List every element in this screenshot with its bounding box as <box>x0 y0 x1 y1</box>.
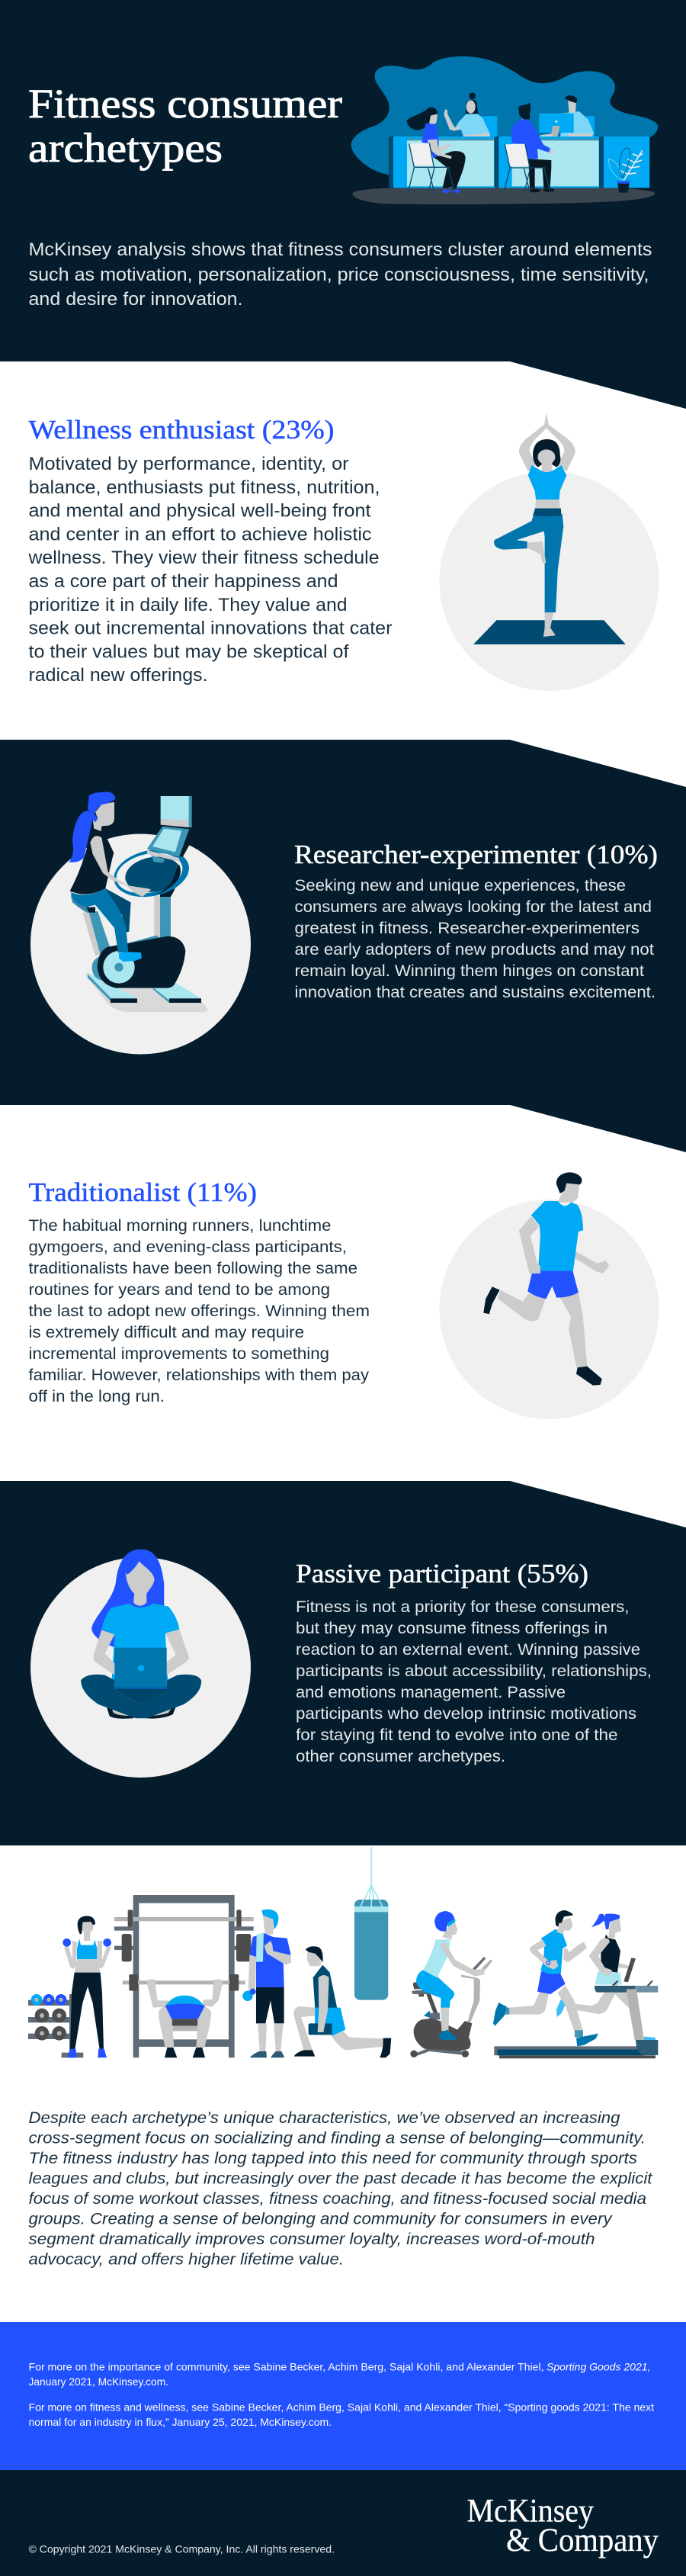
closing paragraph: advocacy, and offers higher lifetime value. <box>29 2251 344 2268</box>
icon: woman on exercise bike in circle <box>30 792 251 1054</box>
body text: passive participant: participants is about accessibility, relationships, <box>296 1662 652 1680</box>
heading: passive participant: Passive participant (55%) <box>296 1559 588 1588</box>
body text: wellness enthusiast: wellness. They view their fitness schedule <box>27 548 379 568</box>
reference notes: January 2021, McKinsey.com. <box>29 2375 168 2388</box>
body text: passive participant <box>296 1598 652 1765</box>
treadmill and two runners <box>493 1910 658 2058</box>
closing paragraph: The fitness industry has long tapped into this need for community through sports <box>29 2150 638 2167</box>
man seated on chair <box>504 102 556 194</box>
body text: passive participant: for staying fit tend to evolve into one of the <box>296 1726 617 1744</box>
closing paragraph <box>29 2109 653 2268</box>
logo: McKinsey & Company: & Company <box>506 2523 659 2558</box>
reference notes: For more on the importance of community, see Sabine Becker, Achim Berg, Sajal Kohli, and Alexander Thiel, <box>29 2361 544 2373</box>
reference notes: normal for an industry in flux,” January 25, 2021, McKinsey.com. <box>29 2416 332 2428</box>
woman with dumbbells <box>63 1916 111 2057</box>
reference notes <box>29 2361 654 2428</box>
body text: researcher-experimenter: consumers are always looking for the latest and <box>294 898 652 916</box>
panel: references <box>0 2322 686 2470</box>
panel: wellness enthusiast <box>27 413 659 691</box>
body text: researcher-experimenter: greatest in fitness. Researcher-experimenters <box>294 920 640 937</box>
intro text: such as motivation, personalization, price consciousness, time sensitivity, <box>29 265 649 285</box>
body text: researcher-experimenter: are early adopters of new products and may not <box>294 941 654 959</box>
man behind desk with monitor <box>539 95 594 138</box>
reference notes: For more on fitness and wellness, see Sabine Becker, Achim Berg, Sajal Kohli, and Alexander Thiel, “Sporting goods 2021: The next <box>29 2401 654 2413</box>
icon: yoga figure in circle <box>439 413 659 691</box>
trainer with towel <box>242 1910 291 2057</box>
body text: traditionalist: is extremely difficult and may require <box>29 1324 304 1341</box>
body text: wellness enthusiast: prioritize it in daily life. They value and <box>29 595 348 615</box>
body text: wellness enthusiast: Motivated by performance, identity, or <box>29 454 349 474</box>
body text: passive participant: and emotions management. Passive <box>296 1684 566 1701</box>
body text: wellness enthusiast: radical new offerings. <box>29 665 207 686</box>
intro text <box>29 239 652 310</box>
logo: McKinsey & Company <box>466 2494 659 2558</box>
closing paragraph: cross-segment focus on socializing and finding a sense of belonging—community. <box>29 2129 646 2147</box>
body text: wellness enthusiast: balance, enthusiasts put fitness, nutrition, <box>29 477 380 498</box>
panel: header <box>0 0 686 409</box>
body text: researcher-experimenter: innovation that creates and sustains excitement. <box>294 984 656 1001</box>
closing paragraph: groups. Creating a sense of belonging and community for consumers in every <box>29 2210 613 2228</box>
copyright: © Copyright 2021 McKinsey & Company, Inc. All rights reserved. <box>29 2542 335 2555</box>
desks <box>389 137 649 188</box>
heading: traditionalist: Traditionalist (11%) <box>29 1177 257 1207</box>
closing paragraph: segment dramatically improves consumer loyalty, increases word-of-mouth <box>29 2231 595 2248</box>
punching bag <box>354 1847 388 2000</box>
title: archetypes <box>28 125 223 171</box>
body text: traditionalist: routines for years and tend to be among <box>29 1281 330 1299</box>
body text: wellness enthusiast: as a core part of their happiness and <box>29 571 338 592</box>
illustration: people meeting at desks <box>351 56 658 204</box>
icon: runner in circle <box>439 1172 659 1419</box>
intro text: and desire for innovation. <box>29 289 242 310</box>
body text: traditionalist: familiar. However, relationships with them pay <box>29 1367 370 1384</box>
body text: wellness enthusiast: and mental and physical well-being front <box>29 500 371 522</box>
illustration: gym scene, right <box>410 1910 658 2058</box>
man on bench press <box>147 1979 223 2057</box>
body text: passive participant: other consumer archetypes. <box>296 1748 505 1765</box>
body text: wellness enthusiast: to their values but may be skeptical of <box>29 642 349 662</box>
man lunging with dumbbell <box>293 1946 391 2057</box>
panel: passive participant <box>0 1481 686 1845</box>
body text: researcher-experimenter: remain loyal. Winning them hinges on constant <box>294 962 644 980</box>
closing paragraph: focus of some workout classes, fitness coaching, and fitness-focused social media <box>29 2190 646 2208</box>
plant <box>608 148 643 193</box>
title <box>28 81 342 171</box>
body text: wellness enthusiast: and center in an effort to achieve holistic <box>29 525 371 544</box>
body text: passive participant: reaction to an external event. Winning passive <box>296 1641 640 1659</box>
body text: traditionalist: traditionalists have been following the same <box>29 1260 357 1277</box>
body text: traditionalist: the last to adopt new offerings. Winning them <box>29 1302 370 1320</box>
closing paragraph: Despite each archetype’s unique characteristics, we’ve observed an increasing <box>29 2109 620 2127</box>
heading: wellness enthusiast: Wellness enthusiast (23%) <box>29 415 334 445</box>
panel: traditionalist <box>29 1172 659 1419</box>
body text: researcher-experimenter: Seeking new and unique experiences, these <box>294 877 626 895</box>
body text: researcher-experimenter <box>294 877 656 1001</box>
squat rack with barbells <box>114 1895 254 2057</box>
panel: researcher-experimenter <box>0 740 686 1152</box>
icon: seated woman with laptop in circle <box>30 1550 251 1778</box>
woman on exercise bike <box>410 1911 492 2057</box>
body text: wellness enthusiast <box>27 454 392 686</box>
body text: passive participant: participants who develop intrinsic motivations <box>296 1705 636 1723</box>
body text: passive participant: but they may consume fitness offerings in <box>296 1620 607 1637</box>
intro text: McKinsey analysis shows that fitness consumers cluster around elements <box>29 239 652 260</box>
illustration: gym scene, left <box>28 1847 391 2057</box>
woman behind desk <box>444 92 490 138</box>
weight shelf <box>28 1994 83 2057</box>
closing paragraph: leagues and clubs, but increasingly over the past decade it has become the explicit <box>29 2170 653 2187</box>
logo: McKinsey & Company: McKinsey <box>466 2494 594 2529</box>
body text: traditionalist: off in the long run. <box>29 1388 165 1405</box>
woman seated on chair <box>406 108 466 193</box>
heading: researcher-experimenter: Researcher-experimenter (10%) <box>294 840 658 869</box>
body text: passive participant: Fitness is not a priority for these consumers, <box>296 1598 630 1616</box>
body text: traditionalist <box>29 1217 370 1405</box>
title: Fitness consumer <box>28 81 342 127</box>
panel: footer <box>0 2470 686 2576</box>
body text: traditionalist: The habitual morning runners, lunchtime <box>29 1217 331 1235</box>
body text: traditionalist: gymgoers, and evening-class participants, <box>29 1238 347 1256</box>
body text: wellness enthusiast: seek out incremental innovations that cater <box>29 618 392 639</box>
body text: traditionalist: incremental improvements to something <box>29 1345 329 1363</box>
reference notes: Sporting Goods 2021, <box>547 2361 651 2373</box>
